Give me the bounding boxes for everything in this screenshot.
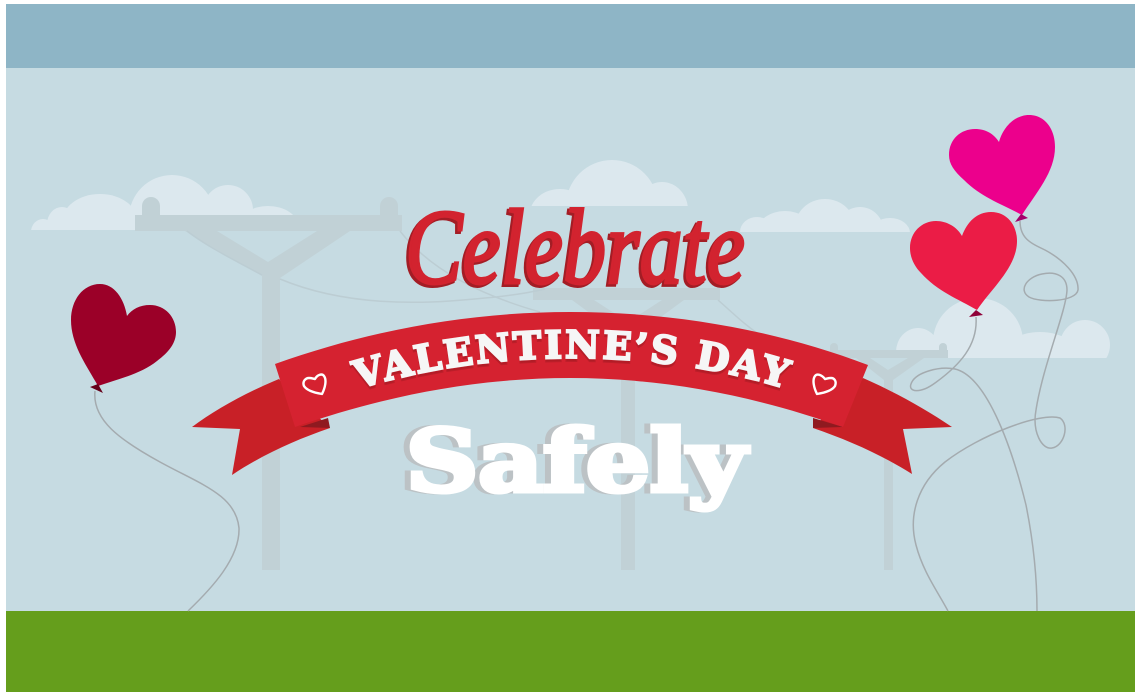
- balloon string: pink heart: [913, 221, 1078, 611]
- cloud: lower right: [896, 298, 1110, 358]
- cloud: right: [740, 199, 910, 232]
- icon: small heart right: [814, 375, 836, 394]
- ribbon fold: right: [813, 418, 843, 428]
- power pole: right: [830, 343, 948, 570]
- heart balloon: red: [910, 212, 1017, 317]
- cloud: left: [31, 175, 293, 230]
- sky background: [6, 68, 1135, 611]
- ribbon tail: left: [192, 379, 330, 475]
- ribbon text: VALENTINE’S DAY: [348, 329, 794, 388]
- power pole: left: [135, 197, 402, 570]
- icon: small heart left: [303, 375, 325, 394]
- heading: Celebrate: Celebrate: [405, 189, 745, 307]
- top band: [6, 4, 1135, 68]
- heart balloon: pink: [949, 115, 1055, 222]
- ribbon fold: left: [300, 418, 330, 428]
- heart balloon: dark red: [71, 284, 176, 393]
- power pole: centre: [533, 288, 720, 570]
- ground: [6, 611, 1135, 692]
- heading: Celebrate: Celebrate: [403, 191, 743, 309]
- ribbon banner: [192, 312, 952, 475]
- ribbon tail: right: [813, 378, 952, 474]
- heading: Safely: Safely: [400, 412, 743, 512]
- heading: Safely: Safely: [406, 412, 749, 512]
- power lines: [187, 231, 760, 335]
- cloud: centre: [532, 160, 688, 206]
- balloon string: red heart: [911, 317, 1037, 611]
- ribbon text shadow: VALENTINE’S DAY: [349, 334, 794, 391]
- balloon string: dark heart: [95, 391, 239, 611]
- ribbon main band: [275, 312, 868, 427]
